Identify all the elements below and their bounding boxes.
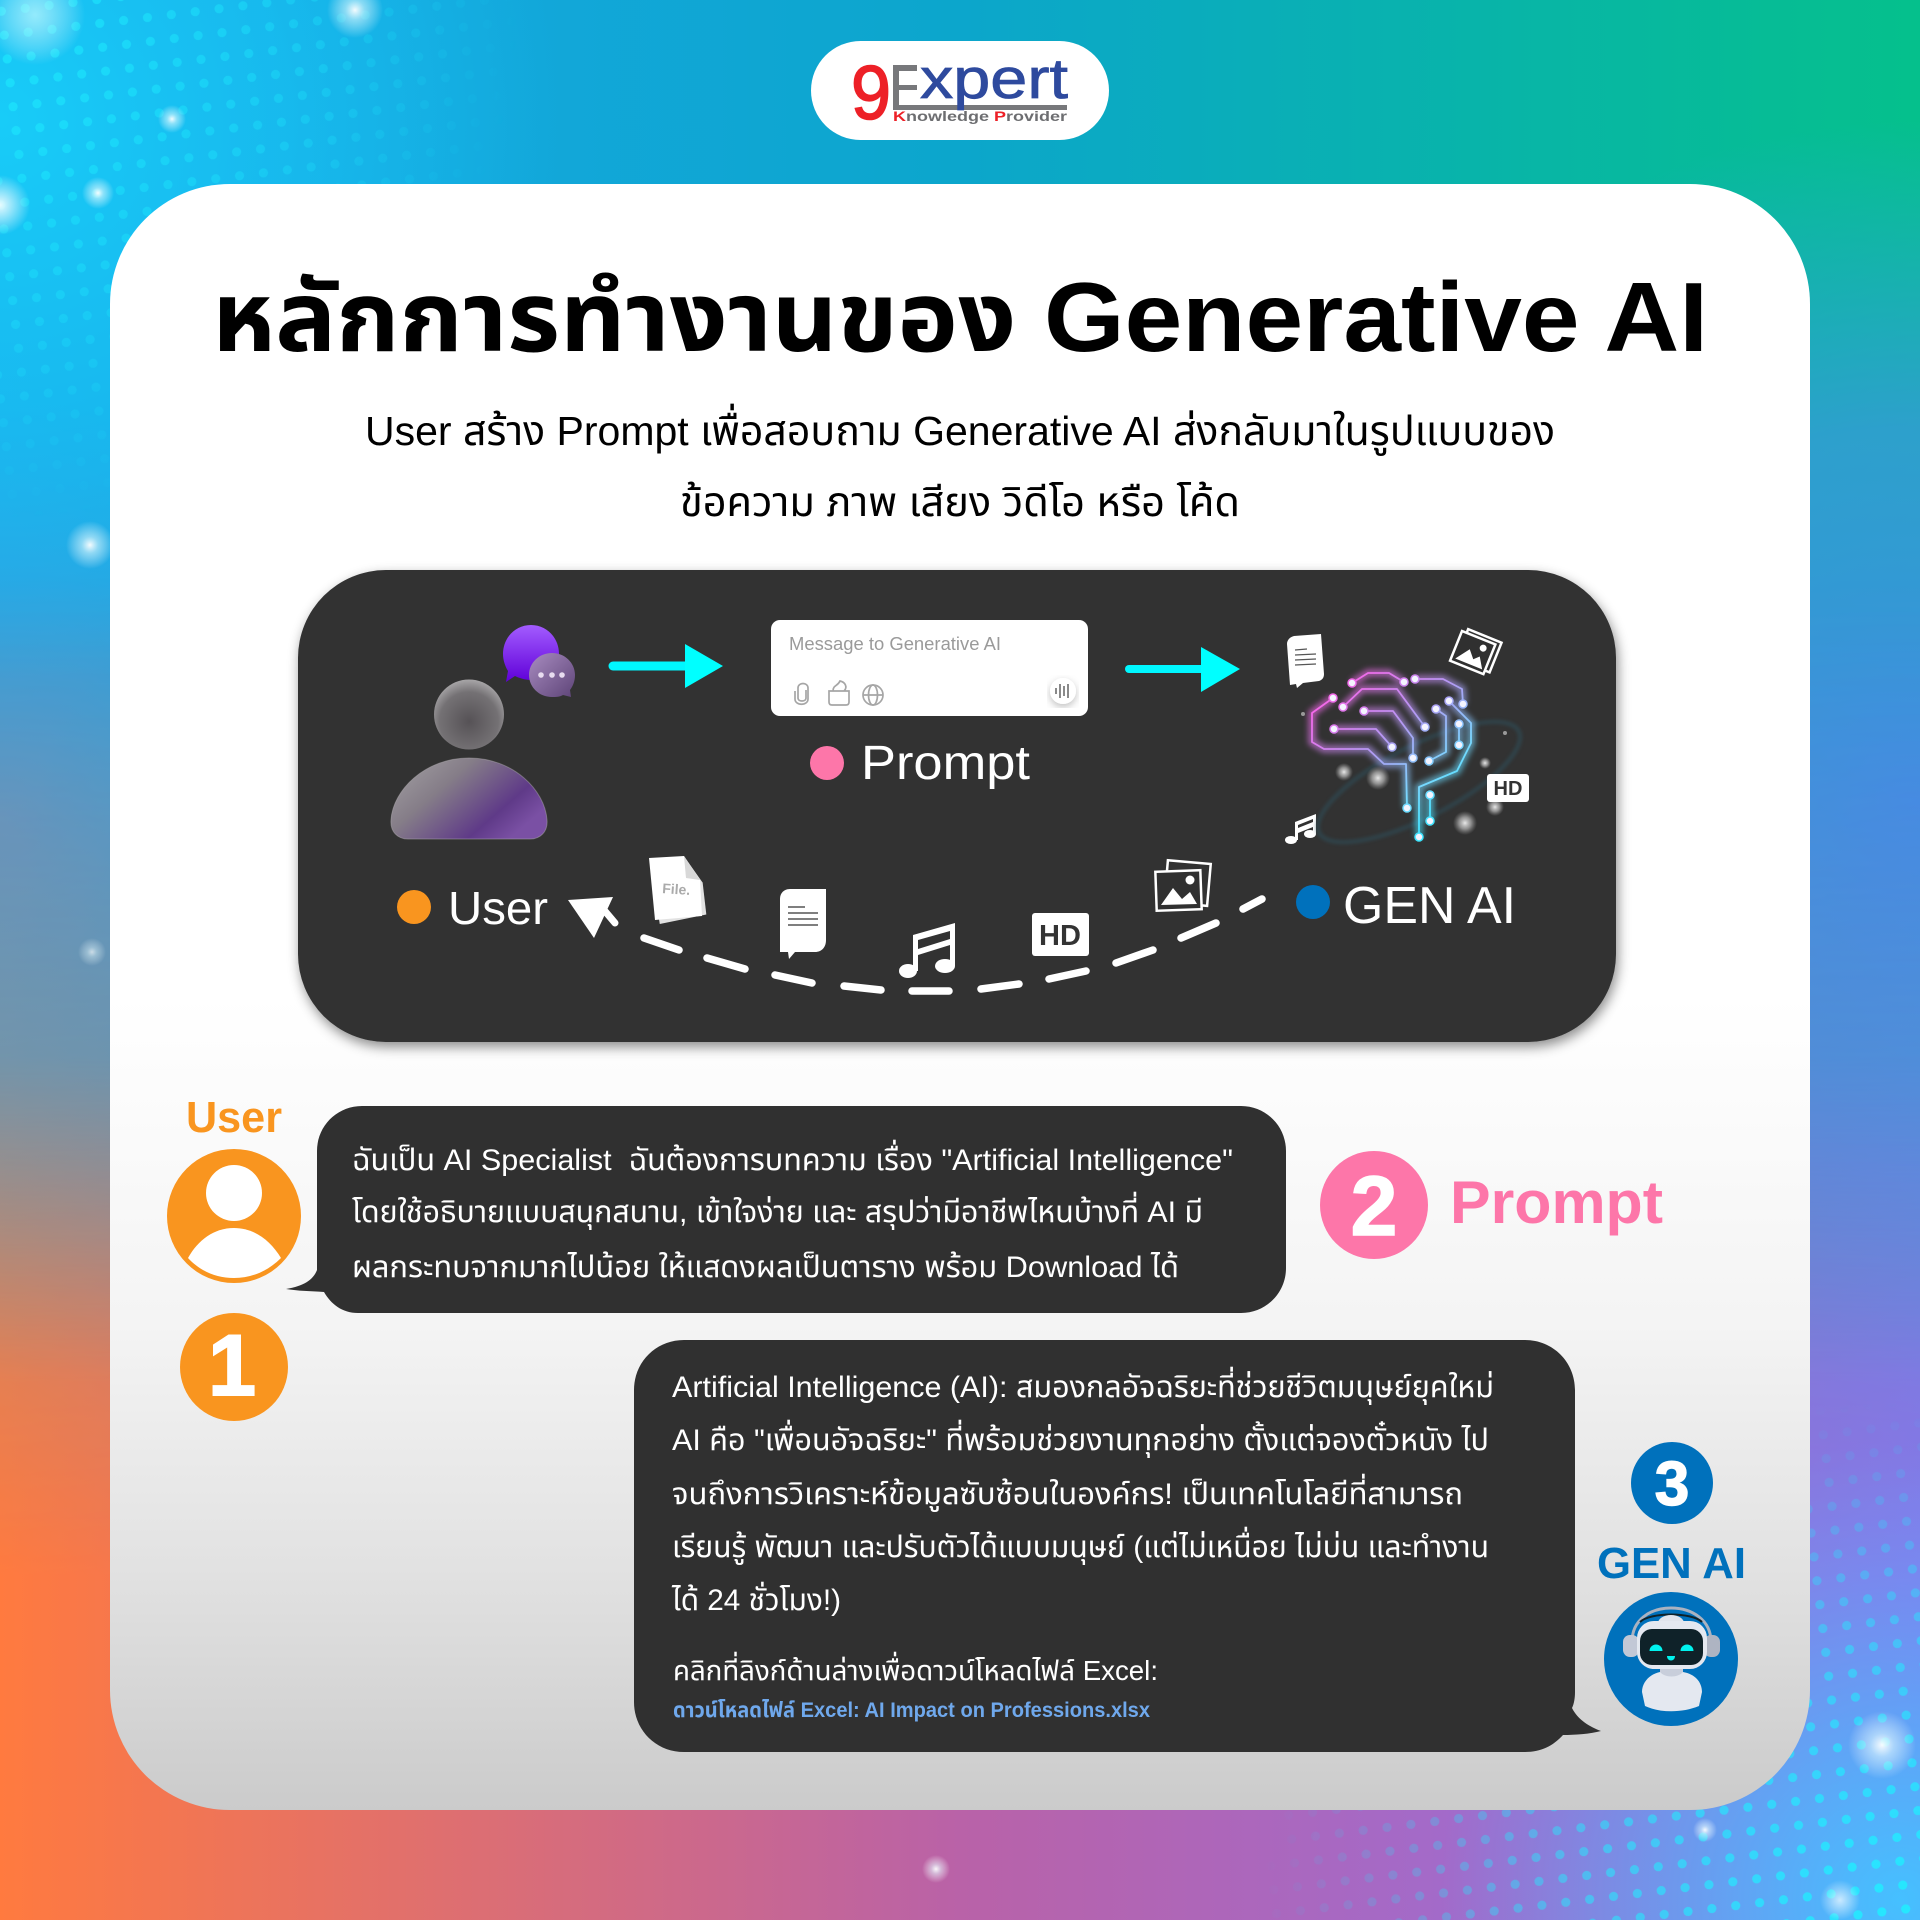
speech bubble: gen ai response: คลิกที่ลิงก์ด้านล่างเพื่อดาวน์โหลดไฟล์ Excel: bbox=[673, 1651, 1158, 1686]
speech bubble: gen ai response: AI คือ "เพื่อนอัจฉริยะ" ที่พร้อมช่วยงานทุกอย่าง ตั้งแต่จองตั๋วหนัง ไป bbox=[672, 1419, 1489, 1458]
arrow: user to prompt bbox=[613, 644, 723, 688]
subtitle: User สร้าง Prompt เพื่อสอบถาม Generative AI ส่งกลับมาในรูปแบบของ bbox=[365, 403, 1555, 456]
badge: step 2: 2 bbox=[1351, 1159, 1397, 1253]
badge: step 3 bbox=[1631, 1442, 1713, 1524]
speech bubble: gen ai response: ดาวน์โหลดไฟล์ Excel: AI Impact on Professions.xlsx bbox=[673, 1699, 1150, 1722]
icon: user figure bbox=[391, 680, 547, 839]
speech bubble: gen ai response: จนถึงการวิเคราะห์ข้อมูลซับซ้อนในองค์กร! เป็นเทคโนโลยีที่สามารถ bbox=[672, 1473, 1463, 1512]
panel: workflow diagram bbox=[298, 570, 1616, 1042]
speech bubble: user prompt: ฉันเป็น AI Specialist ฉันต้องการบทความ เรื่อง "Artificial Intelligence" bbox=[352, 1139, 1233, 1177]
main white card bbox=[110, 184, 1810, 1810]
title bbox=[212, 262, 1708, 372]
subtitle bbox=[365, 403, 1555, 525]
icon: document small bbox=[1287, 634, 1324, 688]
icon: HD badge small bbox=[1487, 774, 1529, 802]
logo pill: Knowledge Provider bbox=[893, 108, 1068, 124]
badge: step 2 bbox=[1320, 1151, 1428, 1259]
icon: photo large bbox=[1155, 860, 1211, 911]
speech bubble: gen ai response: Artificial Intelligence (AI): สมองกลอัจฉริยะที่ช่วยชีวิตมนุษย์ยุคใหม่ bbox=[672, 1366, 1494, 1405]
label: GEN AI: GEN AI bbox=[1343, 877, 1516, 935]
label: Prompt: Prompt bbox=[861, 737, 1030, 790]
label: User: User bbox=[448, 882, 548, 934]
speech bubble: user prompt bbox=[286, 1106, 1286, 1313]
speech bubble: gen ai response bbox=[634, 1340, 1601, 1752]
speech bubble: user prompt: ผลกระทบจากมากไปน้อย ให้แสดงผลเป็นตาราง พร้อม Download ได้ bbox=[352, 1251, 1179, 1284]
icon: music small bbox=[1285, 814, 1316, 844]
icon: HD badge large bbox=[1032, 913, 1089, 956]
icon: HD badge large: HD bbox=[1039, 920, 1081, 952]
speech bubble: user prompt: โดยใช้อธิบายแบบสนุกสนาน, เข้าใจง่าย และ สรุปว่ามีอาชีพไหนบ้างที่ AI มี bbox=[352, 1191, 1203, 1230]
logo pill bbox=[811, 41, 1109, 140]
subtitle: ข้อความ ภาพ เสียง วิดีโอ หรือ โค้ด bbox=[680, 479, 1240, 525]
speech bubble: gen ai response: เรียนรู้ พัฒนา และปรับตัวได้แบบมนุษย์ (แต่ไม่เหนื่อย ไม่บ่น และทำงาน bbox=[672, 1526, 1489, 1565]
icon: HD badge small: HD bbox=[1494, 778, 1522, 800]
label: User bbox=[397, 882, 548, 934]
icon: user avatar bbox=[167, 1149, 301, 1283]
icon: file: File. bbox=[662, 880, 691, 898]
icon: document bbox=[780, 889, 826, 959]
heading: Prompt: Prompt bbox=[1450, 1169, 1663, 1236]
arrow: dashed return path bbox=[568, 897, 1262, 991]
title: หลักการทำงานของ bbox=[212, 262, 1016, 372]
badge: step 3: 3 bbox=[1655, 1450, 1689, 1519]
logo pill: 9 bbox=[851, 51, 891, 136]
heading: GEN AI: GEN AI bbox=[1597, 1539, 1746, 1588]
arrow: prompt to gen ai bbox=[1129, 647, 1240, 692]
icon: AI circuit brain bbox=[1301, 673, 1535, 865]
icon: music note bbox=[899, 923, 955, 978]
icon: file bbox=[649, 856, 707, 924]
title: Generative AI bbox=[1044, 262, 1708, 372]
badge: step 1: 1 bbox=[208, 1318, 256, 1414]
speech bubble: gen ai response: ได้ 24 ชั่วโมง!) bbox=[671, 1581, 841, 1617]
badge: step 1 bbox=[180, 1313, 288, 1421]
prompt input box: Message to Generative AI bbox=[789, 634, 1001, 654]
logo pill: xpert bbox=[920, 47, 1068, 111]
heading: User: User bbox=[186, 1093, 282, 1142]
icon: chat bubbles bbox=[503, 625, 575, 697]
icon: photo small bbox=[1450, 627, 1502, 676]
prompt input box bbox=[771, 620, 1088, 716]
icon: robot avatar bbox=[1604, 1592, 1738, 1726]
